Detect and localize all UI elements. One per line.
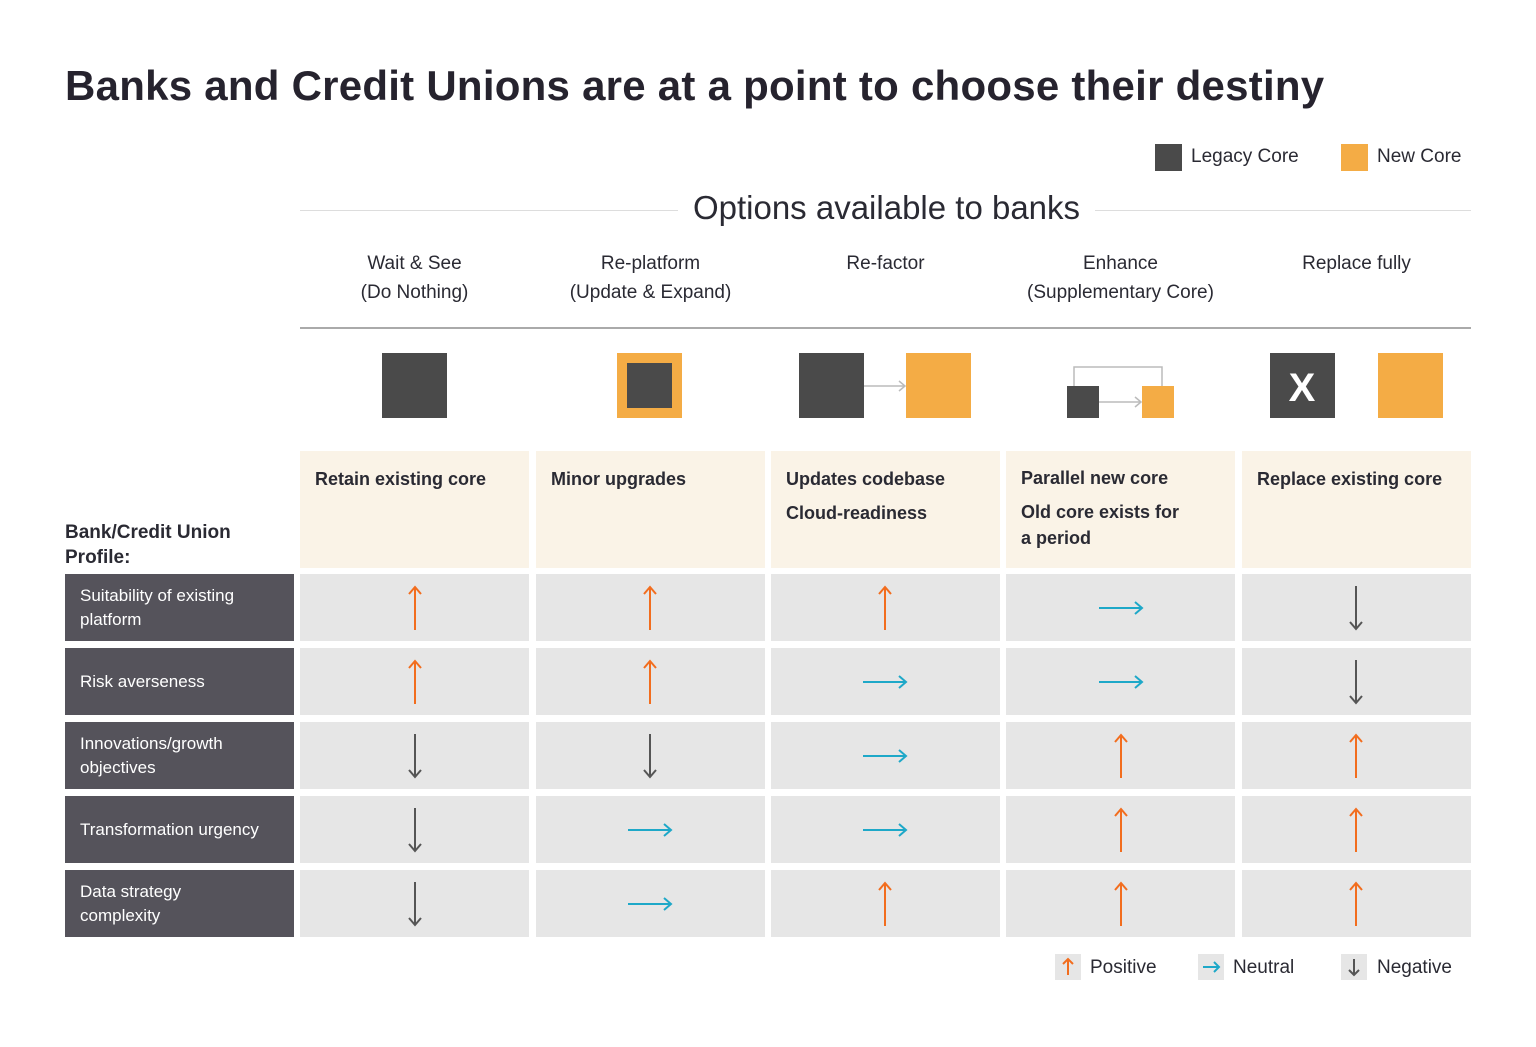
description bands: Retain existing core [315,469,486,489]
legend: arrows: Neutral [1233,957,1294,978]
legend: core types: New Core [1377,146,1461,167]
icon: wait & see [382,353,447,418]
column headers [361,253,1411,303]
text: Data strategy complexity [80,882,181,924]
row labels: Suitability of existing platform [80,586,234,628]
icon: replace [1270,353,1443,418]
text: Minor upgrades [551,469,686,489]
description bands [300,451,529,568]
text: Innovations/growth objectives [80,734,223,776]
legend: core types: Legacy Core [1191,146,1299,167]
profile heading [65,522,231,568]
profile heading: Bank/Credit Union [65,522,231,543]
text: a period [1021,528,1091,548]
text: Cloud-readiness [786,503,927,523]
legend: arrows [1055,954,1452,980]
column headers: (Supplementary Core) [1027,282,1214,303]
icon: re-factor [799,353,971,418]
title: Banks and Credit Unions are at a point to choose their destiny [65,62,1324,109]
icon: replace: X [1289,366,1316,410]
icon: enhance [1067,367,1174,418]
text: Transformation urgency [80,820,259,838]
column headers: (Do Nothing) [361,282,468,303]
legend: arrows: Negative [1377,957,1452,978]
row labels [65,574,294,641]
section heading: Options available to banks [693,189,1080,226]
icon: re-platform [617,353,682,418]
legend: arrows: Positive [1090,957,1157,978]
column headers: (Update & Expand) [570,282,731,303]
text: Risk averseness [80,672,205,690]
profile heading: Profile: [65,547,130,568]
column headers: Re-platform [601,253,700,274]
column headers: Wait & See [367,253,462,274]
column headers: Re-factor [846,253,925,274]
text: Parallel new core [1021,468,1168,488]
column headers: Replace fully [1302,253,1411,274]
icons row [382,353,1443,418]
text: Updates codebase [786,469,945,489]
text: Replace existing core [1257,469,1442,489]
column headers: Enhance [1083,253,1158,274]
text: Old core exists for [1021,502,1179,522]
legend: core types [1155,144,1461,171]
